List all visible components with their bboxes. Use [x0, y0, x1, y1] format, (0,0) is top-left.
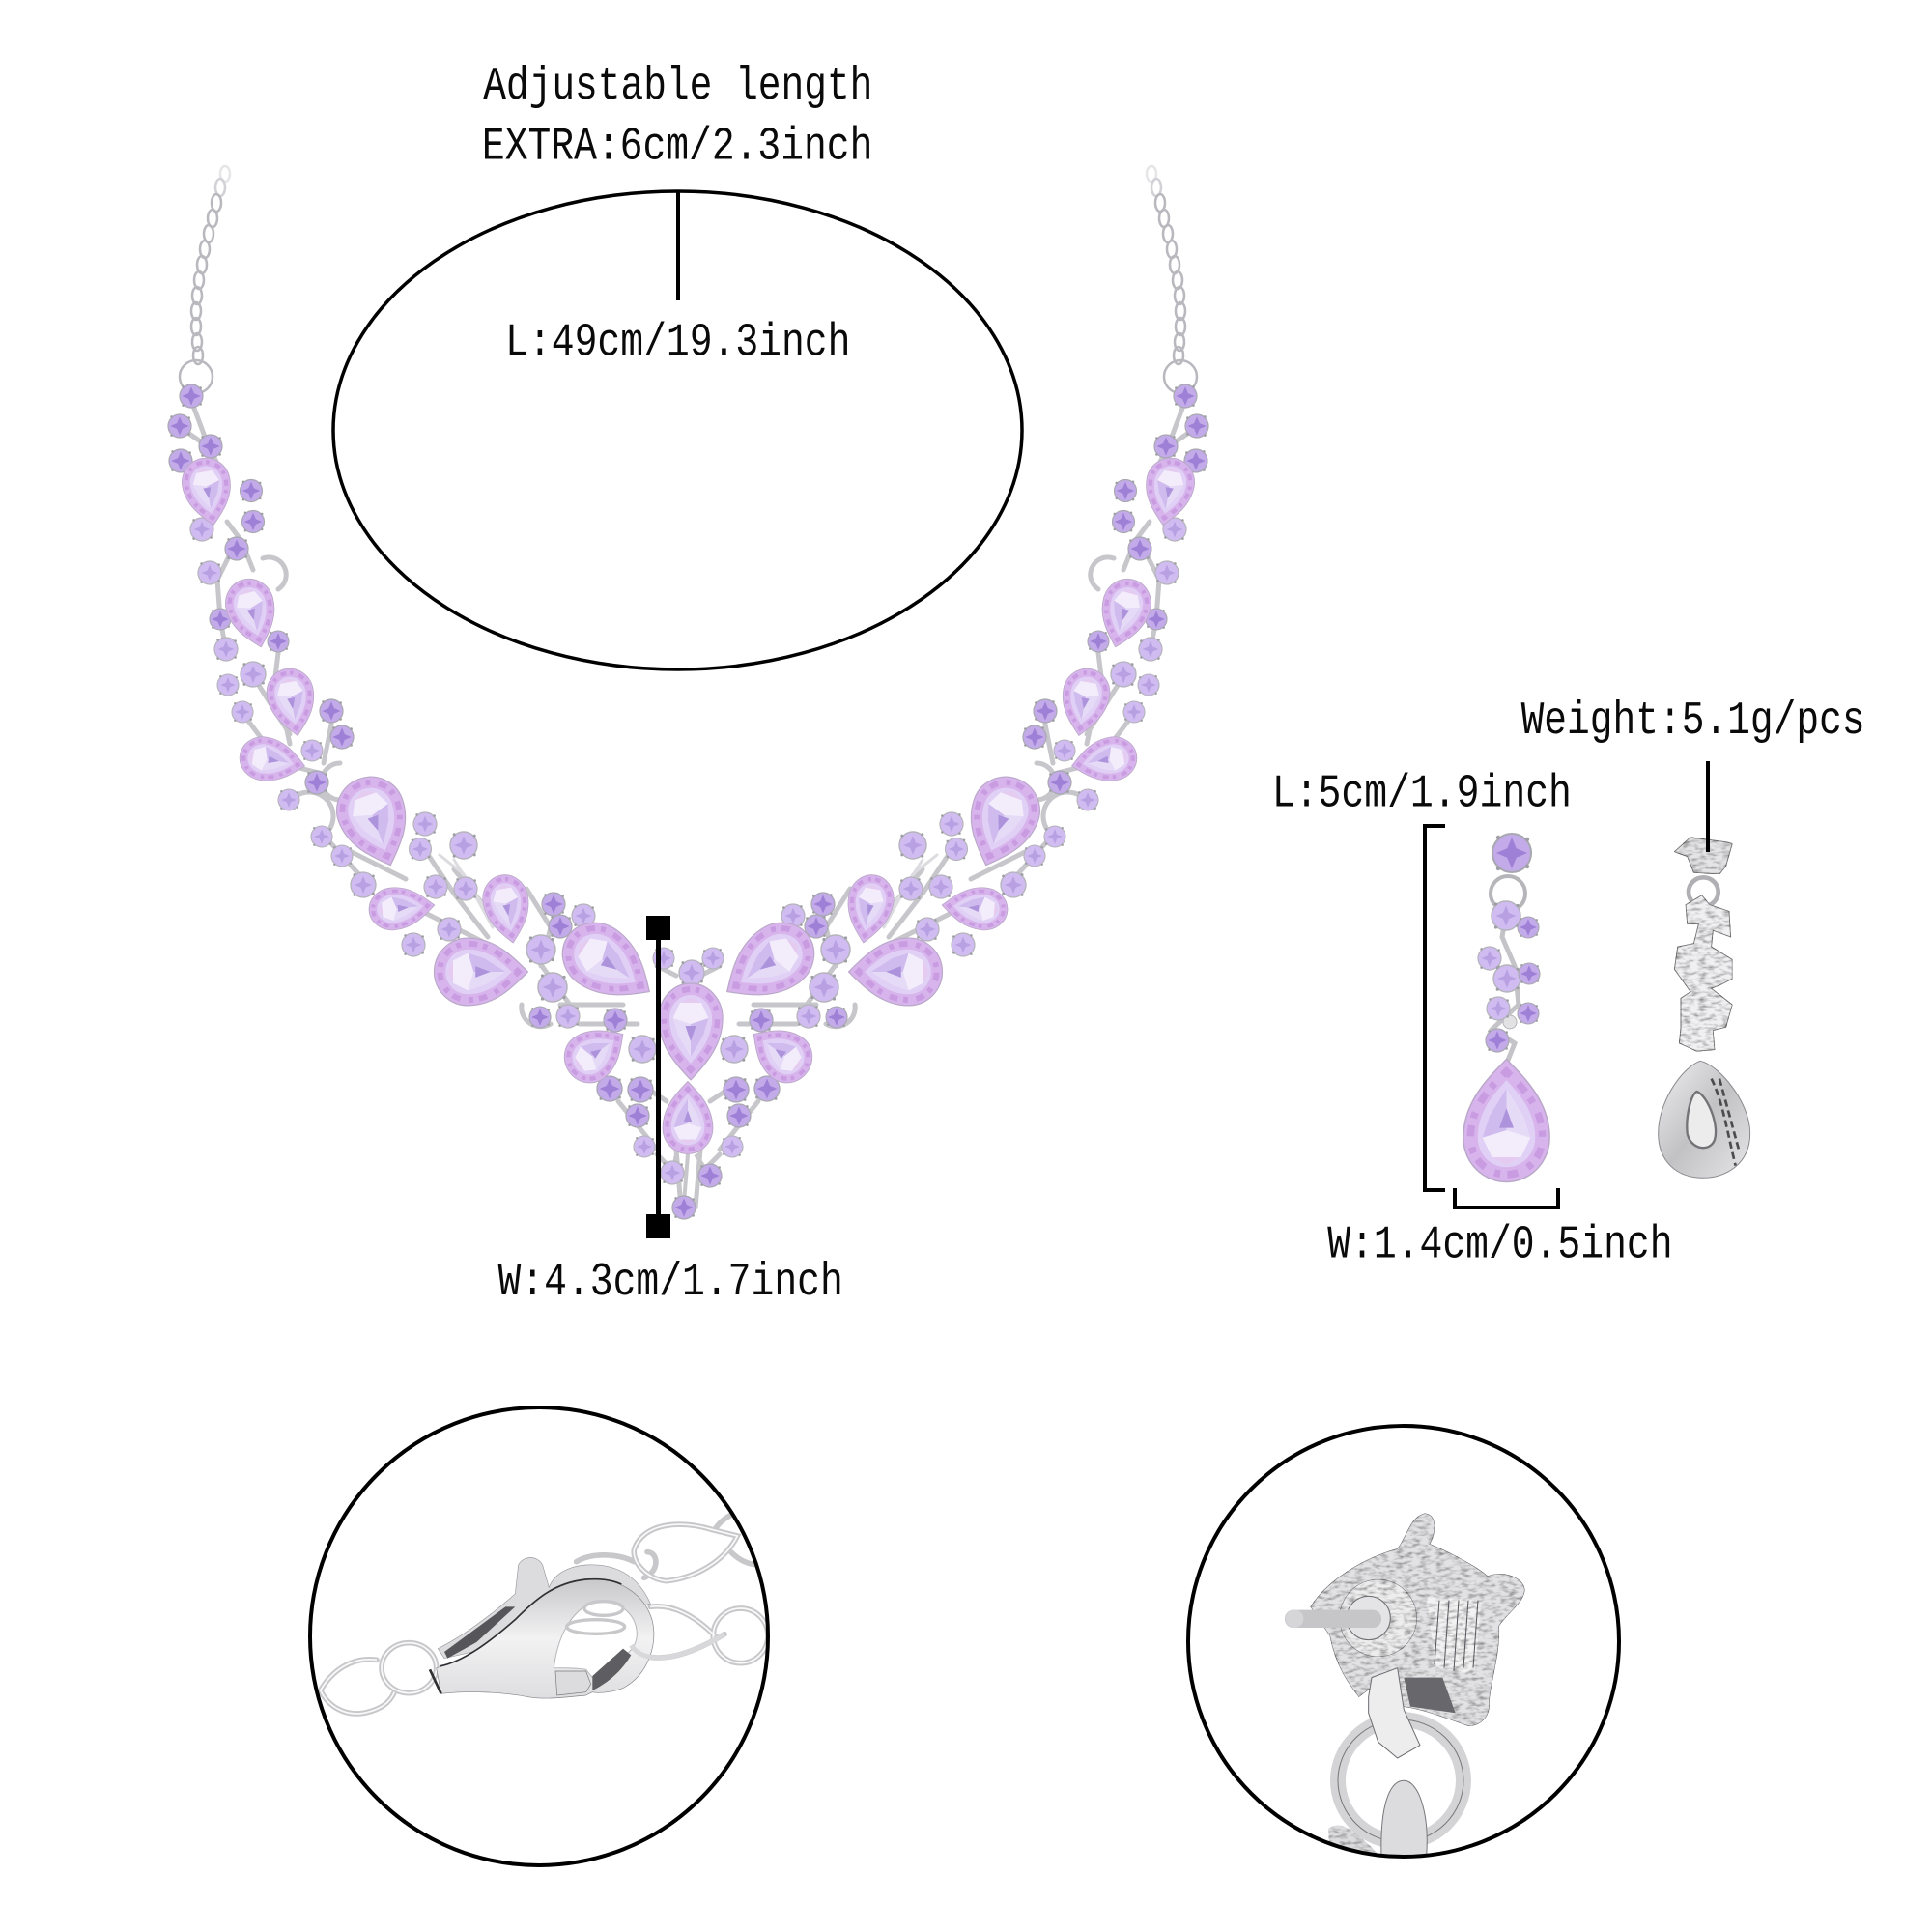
- bracket: earring width: [1455, 1188, 1558, 1208]
- earring post and links: [1285, 1514, 1524, 1858]
- necklace centre: [659, 960, 723, 1219]
- necklace left half: [168, 166, 681, 1208]
- circle: earring post detail: [1188, 1426, 1619, 1858]
- round stones: [168, 384, 674, 1157]
- ellipse: necklace length: [333, 191, 1022, 669]
- clasp chain and body: [321, 1514, 768, 1714]
- teardrop stones: [178, 454, 668, 1093]
- text: earring length: L:5cm/1.9inch: [1272, 768, 1572, 821]
- line: earring weight marker: [1706, 761, 1710, 852]
- text: earring width: W:1.4cm/0.5inch: [1327, 1219, 1673, 1272]
- labels: [482, 60, 1865, 1309]
- earring front: [1463, 834, 1549, 1182]
- circle: clasp detail: [310, 1407, 768, 1865]
- necklace: [168, 166, 1208, 1219]
- bar: necklace width marker: [646, 916, 670, 1238]
- text: earring weight: Weight:5.1g/pcs: [1521, 695, 1865, 748]
- line: length marker: [676, 191, 680, 300]
- text: extra length: EXTRA:6cm/2.3inch: [482, 121, 872, 174]
- silver frame: [184, 406, 681, 1208]
- text: necklace width: W:4.3cm/1.7inch: [498, 1256, 843, 1309]
- text: necklace length: L:49cm/19.3inch: [505, 316, 850, 369]
- bracket: earring length: [1425, 826, 1445, 1190]
- chain: [180, 166, 230, 393]
- earring back: [1659, 838, 1750, 1178]
- necklace right half: [696, 166, 1208, 1208]
- text: adjustable length: Adjustable length: [483, 60, 872, 113]
